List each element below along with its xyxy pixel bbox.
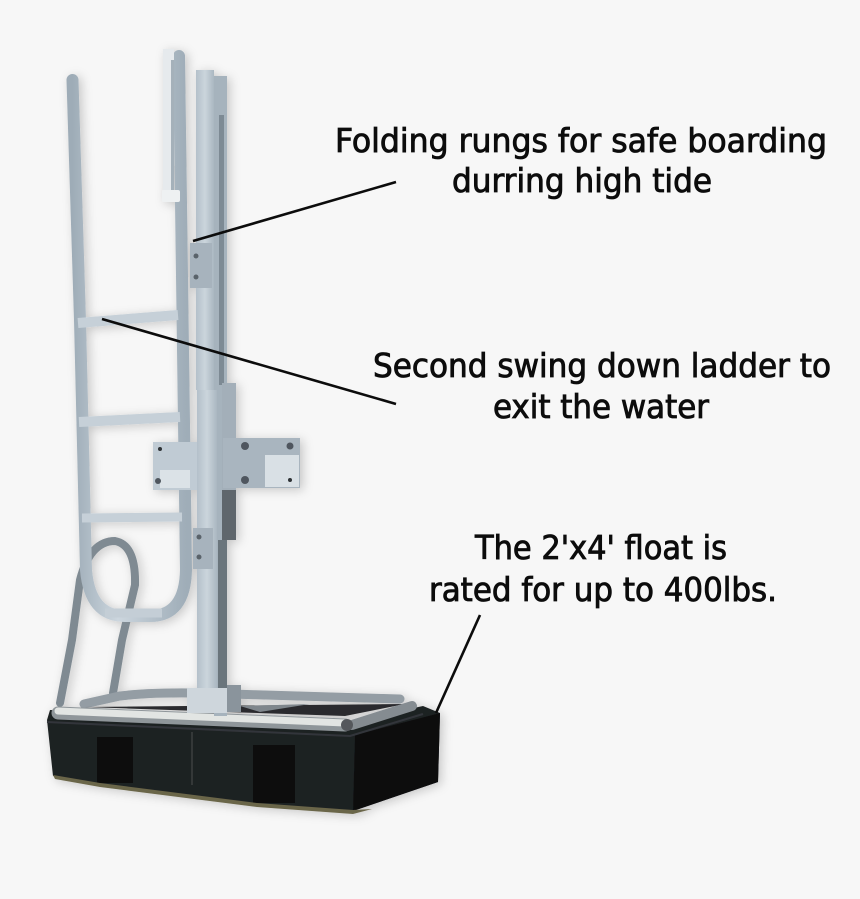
central post	[196, 70, 227, 716]
callout: swing down ladder	[102, 319, 831, 426]
callout: folding rungs	[193, 121, 827, 241]
float frame tubes	[58, 693, 412, 731]
mounting brackets	[153, 243, 300, 713]
swing down ladder	[72, 56, 186, 616]
product photo: dock ladder on float	[47, 49, 440, 814]
float base	[47, 706, 440, 814]
callout: swing down ladder: exit the water	[493, 387, 710, 426]
callout: float rating: The 2'x4' float is	[474, 528, 727, 567]
callout: float rating	[429, 528, 777, 713]
callout: swing down ladder: Second swing down ladder to	[373, 346, 831, 385]
callout: folding rungs: durring high tide	[452, 161, 712, 200]
callout: float rating: rated for up to 400lbs.	[429, 570, 777, 609]
rear tube loop	[60, 541, 135, 703]
callout text: Folding rungs for safe boarding	[335, 121, 827, 160]
top handle	[162, 49, 180, 202]
